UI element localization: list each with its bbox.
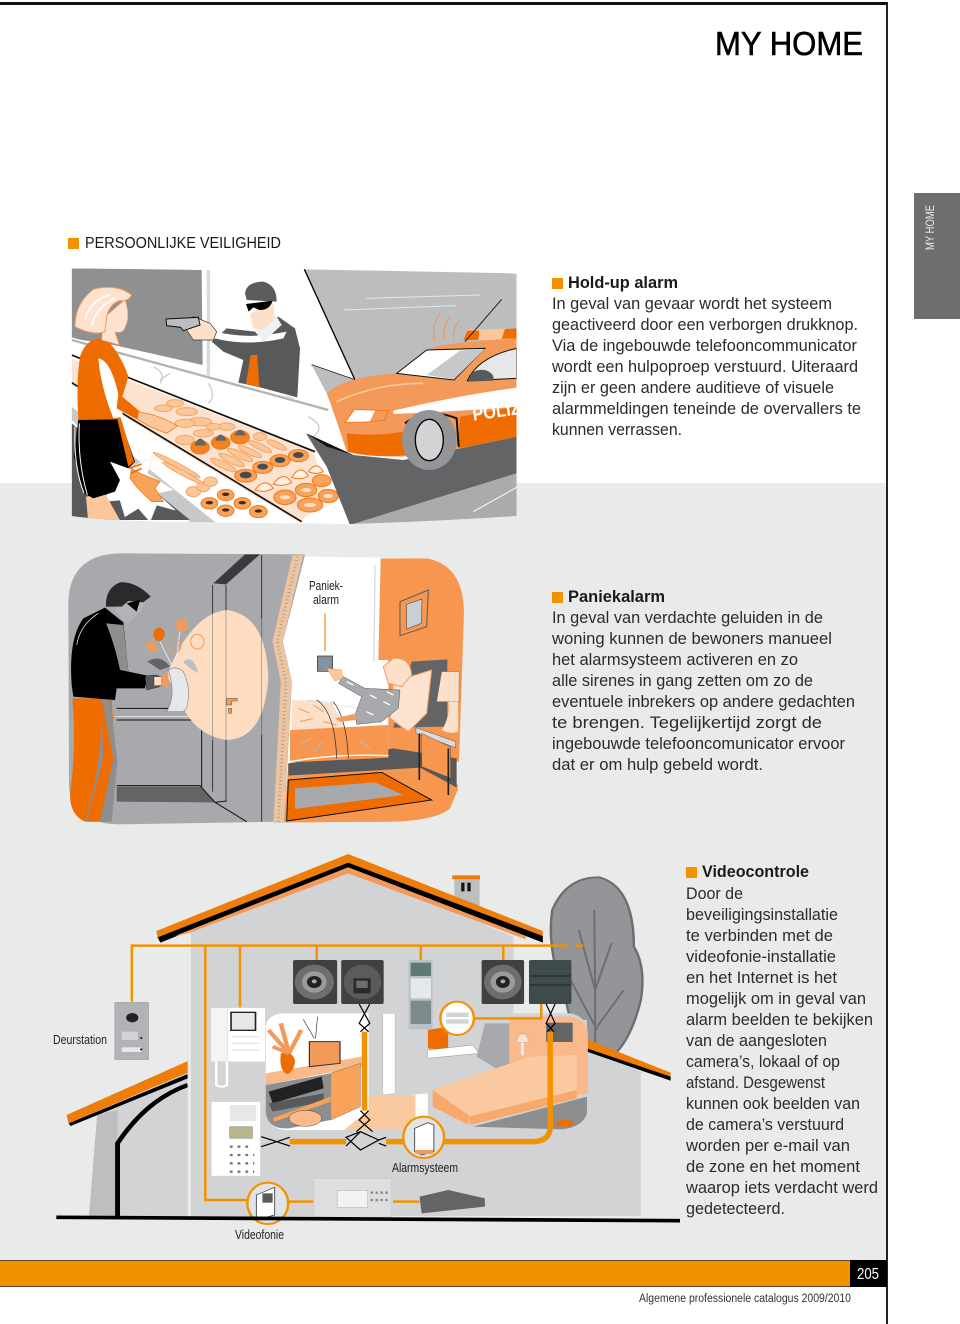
dotted dividing wall <box>272 555 303 822</box>
chimney <box>452 875 480 909</box>
floor and rug <box>284 748 458 822</box>
control unit <box>313 1178 392 1217</box>
text block: videocontrole: camera’s, lokaal of op <box>686 1053 840 1071</box>
woman in bed <box>327 658 412 724</box>
text block: videocontrole: mogelijk om in geval van <box>686 990 866 1008</box>
text block: paniekalarm: ingebouwde telefooncomunicator ervoor <box>552 735 845 753</box>
text block: videocontrole: alarm beelden te bekijken <box>686 1011 873 1029</box>
orange wall <box>378 558 464 762</box>
flashlight beam <box>167 610 268 740</box>
hallway background <box>68 553 305 824</box>
pastries <box>152 400 338 518</box>
label: paniekalarm <box>309 579 343 607</box>
text block: videocontrole: de camera’s verstuurd <box>686 1116 844 1134</box>
cameras and modules <box>293 960 571 1029</box>
top black rule <box>0 2 888 5</box>
text block: videocontrole: de zone en het moment <box>686 1158 860 1176</box>
text block: videocontrole: van de aangesloten <box>686 1032 827 1050</box>
text block: hold-up alarm: zijn er geen andere auditieve of visuele <box>552 379 834 397</box>
videophone icon <box>247 1183 288 1224</box>
text block: hold-up alarm: wordt een hulpoproep verstuurd. Uiteraard <box>551 358 858 376</box>
label: videofonie: Videofonie <box>235 1228 284 1242</box>
lamp and night table <box>416 672 459 795</box>
text block: videocontrole: gedetecteerd. <box>686 1200 785 1218</box>
label: paniekalarm: Paniek- <box>309 579 343 593</box>
tab label: MY HOME <box>923 205 937 250</box>
main roof <box>156 854 543 943</box>
bed <box>290 659 447 762</box>
illustration: house with video control installation <box>56 854 680 1225</box>
wiring <box>132 946 587 1202</box>
text block: paniekalarm: dat er om hulp gebeld wordt. <box>552 756 763 774</box>
text block: hold-up alarm: Hold-up alarm <box>568 274 678 292</box>
wall mirror <box>400 590 428 636</box>
video intercom <box>211 1008 265 1087</box>
alarm switch <box>317 613 333 671</box>
text block: videocontrole: kunnen ook beelden van <box>686 1095 860 1113</box>
page number: 205 <box>857 1266 879 1283</box>
text block: hold-up alarm: geactiveerd door een verborgen drukknop. <box>552 316 858 334</box>
tree <box>551 877 642 1053</box>
label: alarmsysteem: Alarmsysteem <box>392 1161 458 1175</box>
door handle <box>227 698 237 713</box>
text block: videocontrole: Door de <box>686 885 743 903</box>
text block: videocontrole: afstand. Desgewenst <box>686 1074 825 1092</box>
text block: hold-up alarm <box>551 274 861 439</box>
woman customer <box>74 287 177 523</box>
text block: videocontrole <box>685 863 878 1218</box>
road <box>306 433 517 525</box>
text block: paniekalarm: alle sirenes in gang zetten om zo de <box>552 672 813 690</box>
text block: paniekalarm: Paniekalarm <box>568 588 665 606</box>
text block: hold-up alarm: Via de ingebouwde telefooncommunicator <box>552 337 857 355</box>
contact sensor <box>440 1002 474 1035</box>
text block: videocontrole: waarop iets verdacht werd <box>685 1179 878 1197</box>
alarm keypad <box>211 1102 260 1176</box>
label: paniekalarm: alarm <box>313 593 339 607</box>
label: deurstation: Deurstation <box>53 1033 107 1047</box>
catalogue caption: Algemene professionele catalogus 2009/2010 <box>639 1293 851 1305</box>
text block: videocontrole: te verbinden met de <box>686 927 833 945</box>
bedroom <box>283 557 464 822</box>
display case <box>72 337 347 523</box>
room panels <box>266 1013 588 1130</box>
text block: paniekalarm: eventuele inbrekers op andere gedachten <box>552 693 855 711</box>
police scene sky <box>304 269 517 447</box>
text block: paniekalarm <box>551 588 855 774</box>
door <box>115 554 262 822</box>
right vertical rule <box>886 2 888 1324</box>
page number box <box>850 1260 887 1287</box>
text block: videocontrole: Videocontrole <box>702 863 809 881</box>
side tab: my home <box>914 193 960 319</box>
door station <box>115 1002 149 1060</box>
text block: videocontrole: beveiligingsinstallatie <box>686 906 838 924</box>
grey lower background <box>0 483 887 1260</box>
title: MY HOME <box>715 25 863 62</box>
text block: hold-up alarm: alarmmeldingen teneinde de overvallers te <box>552 400 861 418</box>
burglar <box>70 582 168 822</box>
text block: videocontrole: worden per e-mail van <box>685 1137 850 1155</box>
illustration: hold-up in a bakery and police car <box>72 268 517 524</box>
text block: videocontrole: en het Internet is het <box>686 969 837 987</box>
text block: paniekalarm: te brengen. Tegelijkertijd zorgt de <box>552 714 822 732</box>
modem <box>420 1190 485 1213</box>
robber <box>166 282 300 399</box>
alarm burst behind hand <box>106 456 176 522</box>
right roof <box>587 1039 671 1081</box>
ground line <box>56 1217 680 1221</box>
car lettering: POLIZ <box>471 397 522 425</box>
text block: hold-up alarm: In geval van gevaar wordt het systeem <box>552 295 832 313</box>
orange footer band <box>0 1260 850 1287</box>
shop wall <box>72 268 203 365</box>
police car <box>312 299 522 470</box>
text block: videocontrole: videofonie-installatie <box>686 948 836 966</box>
text block: paniekalarm: woning kunnen de bewoners manueel <box>551 630 832 648</box>
text block: paniekalarm: In geval van verdachte geluiden in de <box>552 609 823 627</box>
section heading: PERSOONLIJKE VEILIGHEID <box>85 235 281 252</box>
illustration: burglar at door and panic alarm in bedroom <box>68 553 464 824</box>
house wall <box>188 868 644 1216</box>
text block: paniekalarm: het alarmsysteem activeren en zo <box>552 651 798 669</box>
text block: hold-up alarm: kunnen verrassen. <box>552 421 682 439</box>
alarm siren icon <box>403 1117 444 1158</box>
garage <box>67 1060 190 1216</box>
vase with flowers <box>145 618 204 712</box>
